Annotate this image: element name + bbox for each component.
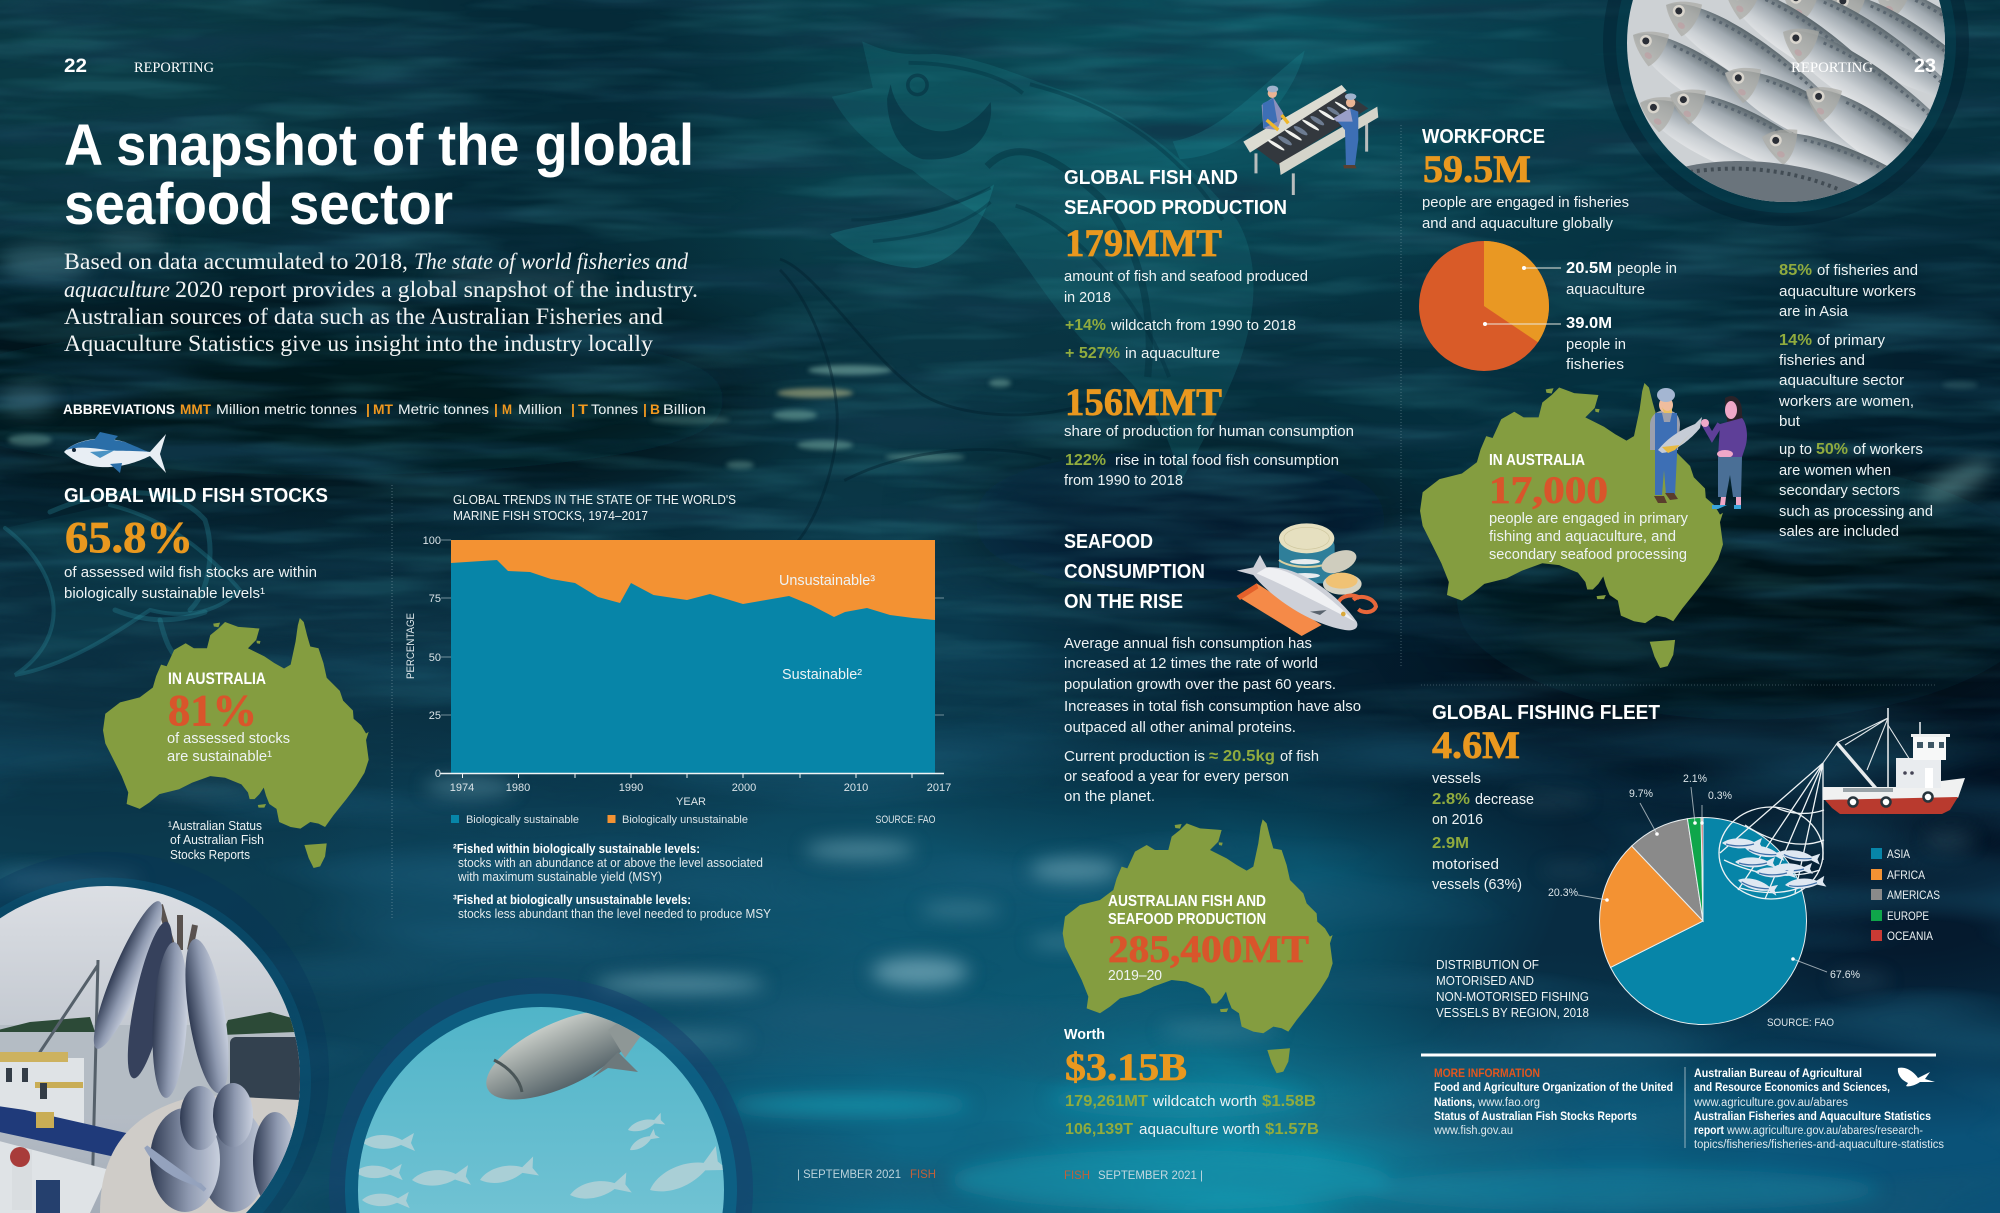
description: from 1990 to 2018 <box>1064 472 1183 489</box>
map: Australia 81% <box>103 618 369 868</box>
chart title <box>453 492 736 523</box>
footer left: FISH <box>910 1167 936 1181</box>
photo: tuna catch on boat <box>0 852 329 1213</box>
footer right: FISH <box>1064 1168 1090 1182</box>
region legend: OCEANIA <box>1887 929 1933 943</box>
workforce side notes: but <box>1779 413 1801 430</box>
map: Australian production: 2019–20 <box>1108 967 1162 984</box>
footnotes 2 and 3: ³Fished at biologically unsustainable levels: <box>453 893 691 907</box>
workforce side notes: fisheries and <box>1779 352 1865 369</box>
abbreviations line: | <box>571 401 575 417</box>
description: in aquaculture <box>1125 345 1220 362</box>
footer right: SEPTEMBER 2021 | <box>1098 1168 1203 1182</box>
intro paragraph: Aquaculture Statistics give us insight into the industry locally <box>64 331 654 356</box>
workforce side notes: 14% <box>1779 332 1812 349</box>
column 2: www.agriculture.gov.au/abares <box>1693 1097 1848 1109</box>
y axis labels: 25 <box>429 710 441 722</box>
stat 179MMT: 179MMT <box>1065 222 1222 265</box>
abbreviations line <box>63 401 706 417</box>
panel: global fish and seafood production <box>1064 166 1354 489</box>
y axis labels <box>405 535 441 780</box>
fleet text <box>1432 770 1534 893</box>
fish watermark, top centre <box>780 41 1305 541</box>
title: seafood sector <box>64 172 453 237</box>
x axis labels: YEAR <box>676 796 706 808</box>
abbreviations line: MT <box>373 401 393 417</box>
intro paragraph: Based on data accumulated to 2018, <box>64 249 408 274</box>
panel: global fishing fleet <box>1432 701 1965 1029</box>
illustration: seafood products <box>1237 523 1376 636</box>
stat 59.5M: 59.5M <box>1423 148 1531 191</box>
footnotes 2 and 3: stocks less abundant than the level needed to produce MSY <box>458 907 772 921</box>
body text: increased at 12 times the rate of world <box>1064 655 1318 672</box>
abbreviations line: Billion <box>663 401 706 417</box>
description: 122% <box>1065 452 1106 469</box>
pie labels: people in <box>1566 336 1626 353</box>
column 2: www.agriculture.gov.au/abares/research- <box>1726 1125 1923 1137</box>
description: amount of fish and seafood produced <box>1064 268 1308 285</box>
workforce side notes: are women when <box>1779 462 1891 479</box>
description <box>64 564 317 602</box>
map: Australian workforce: fishing and aquaculture, and <box>1489 528 1676 545</box>
pie labels: people in <box>1617 260 1677 277</box>
fleet text: 2.8% <box>1432 791 1470 808</box>
panel: more information <box>1421 1054 1944 1151</box>
workforce side notes: are in Asia <box>1779 303 1849 320</box>
illustration: woman <box>1701 396 1747 509</box>
pie labels: aquaculture <box>1566 281 1645 298</box>
panel: worth <box>1064 1026 1319 1138</box>
column 2: topics/fisheries/fisheries-and-aquaculture-statistics <box>1694 1139 1944 1151</box>
abbreviations line: ABBREVIATIONS <box>63 401 175 417</box>
wildcatch and aquaculture values: 106,139T <box>1065 1121 1133 1138</box>
chart panel: global trends <box>405 492 951 921</box>
column 1: Food and Agriculture Organization of the United <box>1434 1082 1673 1094</box>
map: Australia 81%: IN AUSTRALIA <box>168 670 266 688</box>
heading <box>1064 166 1287 219</box>
fleet text: 2.9M <box>1432 835 1469 852</box>
panel: global wild fish stocks <box>64 484 369 868</box>
abbreviations line: M <box>502 401 512 417</box>
body text <box>1064 635 1361 805</box>
body text: of fish <box>1280 748 1319 765</box>
chart caption: NON-MOTORISED FISHING <box>1436 989 1589 1004</box>
description: rise in total food fish consumption <box>1115 452 1339 469</box>
body text: Current production is <box>1064 748 1205 765</box>
source note: SOURCE: FAO <box>1767 1017 1834 1029</box>
description: in 2018 <box>1064 289 1111 306</box>
panel: workforce <box>1419 125 1933 540</box>
stat $3.15B: $3.15B <box>1065 1046 1187 1089</box>
page header right <box>1791 56 1936 77</box>
map: Australia 81%: 81% <box>168 686 257 735</box>
intro paragraph: Australian sources of data such as the Australian Fisheries and <box>64 304 664 329</box>
x axis labels: 2017 <box>927 782 951 794</box>
y axis labels: 0 <box>435 768 441 780</box>
heading: GLOBAL FISHING FLEET <box>1432 701 1660 724</box>
fish watermark, left <box>5 493 240 675</box>
chart caption: VESSELS BY REGION, 2018 <box>1436 1005 1589 1020</box>
chart legend: Biologically sustainable <box>466 814 579 826</box>
fleet text: vessels <box>1432 770 1481 787</box>
map: Australian workforce: people are engaged in primary <box>1489 510 1688 527</box>
chart legend: SOURCE: FAO <box>876 814 936 826</box>
chart caption <box>1436 957 1589 1020</box>
region legend: EUROPE <box>1887 909 1929 923</box>
workforce side notes: such as processing and <box>1779 503 1933 520</box>
stacked area chart: Sustainable² <box>782 667 862 683</box>
page header left <box>64 56 214 77</box>
x axis labels: 1980 <box>506 782 530 794</box>
description: wildcatch from 1990 to 2018 <box>1110 317 1296 334</box>
pie labels: 39.0M <box>1566 315 1612 332</box>
page header left: 22 <box>64 56 87 77</box>
wildcatch and aquaculture values: aquaculture worth <box>1139 1121 1260 1138</box>
column 2: report <box>1694 1125 1724 1137</box>
chart title: GLOBAL TRENDS IN THE STATE OF THE WORLD'S <box>453 492 736 507</box>
pie labels <box>1548 773 1860 981</box>
fleet text: vessels (63%) <box>1432 876 1522 893</box>
footnote 1: Stocks Reports <box>170 848 250 862</box>
panel: worth: Worth <box>1064 1026 1105 1043</box>
map: Australia 81%: are sustainable¹ <box>167 748 272 765</box>
map: Australian workforce: IN AUSTRALIA <box>1489 452 1585 469</box>
page header right: 23 <box>1914 56 1936 77</box>
map: Australian production: AUSTRALIAN FISH AND <box>1108 893 1266 910</box>
wildcatch and aquaculture values <box>1065 1093 1319 1138</box>
wildcatch and aquaculture values: wildcatch worth <box>1152 1093 1257 1110</box>
abbreviations line: Million metric tonnes <box>216 401 357 417</box>
fleet text: decrease <box>1475 791 1534 808</box>
column 2 <box>1693 1068 1944 1151</box>
description: + 527% <box>1065 345 1120 362</box>
panel: seafood consumption on the rise <box>1064 530 1361 805</box>
heading: ON THE RISE <box>1064 590 1183 613</box>
pie labels: 0.3% <box>1708 790 1732 802</box>
abbreviations line: MMT <box>180 401 211 417</box>
region legend: ASIA <box>1887 847 1910 861</box>
abbreviations line: Million <box>518 401 562 417</box>
x axis labels: 1990 <box>619 782 643 794</box>
pie chart: workforce split <box>1419 241 1561 371</box>
workforce side notes: up to <box>1779 441 1812 458</box>
description: people are engaged in fisheries <box>1422 194 1629 211</box>
body text: on the planet. <box>1064 788 1155 805</box>
intro paragraph: aquaculture <box>64 277 170 302</box>
abbreviations line: | <box>366 401 370 417</box>
map: Australian production: SEAFOOD PRODUCTION <box>1108 911 1266 928</box>
wildcatch and aquaculture values: 179,261MT <box>1065 1093 1148 1110</box>
wildcatch and aquaculture values: $1.58B <box>1262 1093 1316 1110</box>
description <box>1422 194 1629 232</box>
workforce side notes: sales are included <box>1779 523 1899 540</box>
chart caption: DISTRIBUTION OF <box>1436 957 1539 972</box>
workforce side notes: workers are women, <box>1778 393 1914 410</box>
map: Australian workforce: 17,000 <box>1489 469 1608 512</box>
footnote 1: ¹Australian Status <box>168 819 262 833</box>
fleet text: on 2016 <box>1432 811 1483 828</box>
x axis labels: 1974 <box>450 782 474 794</box>
abbreviations line: | <box>494 401 498 417</box>
body text: outpaced all other animal proteins. <box>1064 719 1296 736</box>
chart caption: MOTORISED AND <box>1436 973 1534 988</box>
y axis labels: 50 <box>429 652 441 664</box>
column 1: Nations, <box>1434 1097 1475 1109</box>
column 1: MORE INFORMATION <box>1434 1068 1540 1080</box>
body text: ≈ 20.5kg <box>1209 748 1275 765</box>
illustration: fishing boat <box>1823 708 1965 814</box>
x axis labels: 2000 <box>732 782 756 794</box>
body text: Increases in total fish consumption have also <box>1064 698 1361 715</box>
pie labels: 67.6% <box>1830 969 1860 981</box>
stacked area chart <box>440 540 944 778</box>
workforce side notes: secondary sectors <box>1779 482 1900 499</box>
abbreviations line: | <box>643 401 647 417</box>
region legend: AMERICAS <box>1887 888 1940 902</box>
body text: Average annual fish consumption has <box>1064 635 1312 652</box>
pie labels: 20.3% <box>1548 887 1578 899</box>
heading: GLOBAL WILD FISH STOCKS <box>64 484 328 507</box>
region legend <box>1871 847 1940 943</box>
column 2: Australian Fisheries and Aquaculture Statistics <box>1694 1111 1931 1123</box>
chart title: MARINE FISH STOCKS, 1974–2017 <box>453 508 648 523</box>
footer left: | SEPTEMBER 2021 <box>797 1167 901 1181</box>
pie labels <box>1566 260 1677 373</box>
description <box>1064 268 1308 362</box>
y axis labels: PERCENTAGE <box>405 613 417 679</box>
workforce side notes: of primary <box>1817 332 1886 349</box>
y axis labels: 75 <box>429 593 441 605</box>
abbreviations line: B <box>650 401 660 417</box>
stat 65.8%: 65.8% <box>65 513 193 562</box>
illustration: net with fish <box>1719 763 1826 899</box>
map: Australian production <box>1063 819 1333 1073</box>
heading: CONSUMPTION <box>1064 560 1205 583</box>
workforce side notes <box>1778 262 1933 540</box>
body text: or seafood a year for every person <box>1064 768 1289 785</box>
heading: WORKFORCE <box>1422 125 1545 148</box>
fleet text: motorised <box>1432 856 1499 873</box>
column 1: www.fish.gov.au <box>1433 1125 1513 1137</box>
heading: SEAFOOD <box>1064 530 1153 553</box>
footnotes 2 and 3: with maximum sustainable yield (MSY) <box>457 870 662 884</box>
map: Australian workforce <box>1420 383 1723 668</box>
heading <box>1064 530 1205 613</box>
workforce side notes: aquaculture sector <box>1779 372 1904 389</box>
workforce side notes: of fisheries and <box>1817 262 1918 279</box>
y axis labels: 100 <box>423 535 441 547</box>
description: share of production for human consumption <box>1064 423 1354 440</box>
title <box>64 113 694 237</box>
description <box>1064 423 1354 489</box>
abbreviations line: T <box>578 401 589 417</box>
x axis labels <box>450 782 951 808</box>
chart legend: Biologically unsustainable <box>622 814 748 826</box>
pie labels: 9.7% <box>1629 788 1653 800</box>
description: biologically sustainable levels¹ <box>64 585 265 602</box>
column 2: Australian Bureau of Agricultural <box>1694 1068 1862 1080</box>
illustration: conveyor with workers <box>1243 85 1378 195</box>
stat 156MMT: 156MMT <box>1065 381 1222 424</box>
footnotes 2 and 3: ²Fished within biologically sustainable levels: <box>453 842 700 856</box>
column 1: Status of Australian Fish Stocks Reports <box>1434 1111 1637 1123</box>
workforce side notes: of workers <box>1853 441 1923 458</box>
map: Australian production: 285,400MT <box>1108 928 1309 971</box>
body text: population growth over the past 60 years. <box>1064 676 1336 693</box>
description: of assessed wild fish stocks are within <box>64 564 317 581</box>
footnote 1: of Australian Fish <box>170 833 264 847</box>
footnotes 2 and 3 <box>453 842 772 921</box>
photo: fish underwater <box>329 978 753 1213</box>
stacked area chart: Unsustainable³ <box>779 573 875 589</box>
photo: sardines <box>1603 0 1969 226</box>
column 1: www.fao.org <box>1477 1097 1540 1109</box>
workforce side notes: 50% <box>1816 441 1848 458</box>
description: +14% <box>1065 317 1106 334</box>
icon: white fish <box>1898 1068 1935 1086</box>
workforce side notes: 85% <box>1779 262 1812 279</box>
column 1 <box>1433 1068 1673 1137</box>
chart legend <box>451 814 936 826</box>
column 2: and Resource Economics and Sciences, <box>1694 1082 1890 1094</box>
page header right: REPORTING <box>1791 60 1873 76</box>
map: Australian workforce: secondary seafood processing <box>1489 546 1687 563</box>
illustration: fisherman <box>1650 388 1702 503</box>
pie labels: 20.5M <box>1566 260 1612 277</box>
workforce side notes: aquaculture workers <box>1779 283 1916 300</box>
map: Australia 81%: of assessed stocks <box>167 730 290 747</box>
title: A snapshot of the global <box>64 113 694 178</box>
intro paragraph: The state of world fisheries and <box>414 249 688 274</box>
intro paragraph <box>64 249 698 356</box>
region legend: AFRICA <box>1887 868 1925 882</box>
pie chart: vessels by region <box>1600 818 1807 1025</box>
abbreviations line: Tonnes <box>591 401 638 417</box>
pie labels: 2.1% <box>1683 773 1707 785</box>
x axis labels: 2010 <box>844 782 868 794</box>
heading: SEAFOOD PRODUCTION <box>1064 196 1287 219</box>
heading: GLOBAL FISH AND <box>1064 166 1238 189</box>
abbreviations line: Metric tonnes <box>398 401 489 417</box>
icon: tuna <box>64 432 166 473</box>
page header left: REPORTING <box>134 60 214 76</box>
footnotes 2 and 3: stocks with an abundance at or above the level associated <box>458 856 763 870</box>
footnote 1 <box>168 819 264 862</box>
pie labels: fisheries <box>1566 356 1624 373</box>
wildcatch and aquaculture values: $1.57B <box>1265 1121 1319 1138</box>
description: and and aquaculture globally <box>1422 215 1613 232</box>
intro paragraph: 2020 report provides a global snapshot of the industry. <box>175 277 698 302</box>
stat 4.6M: 4.6M <box>1432 724 1520 767</box>
